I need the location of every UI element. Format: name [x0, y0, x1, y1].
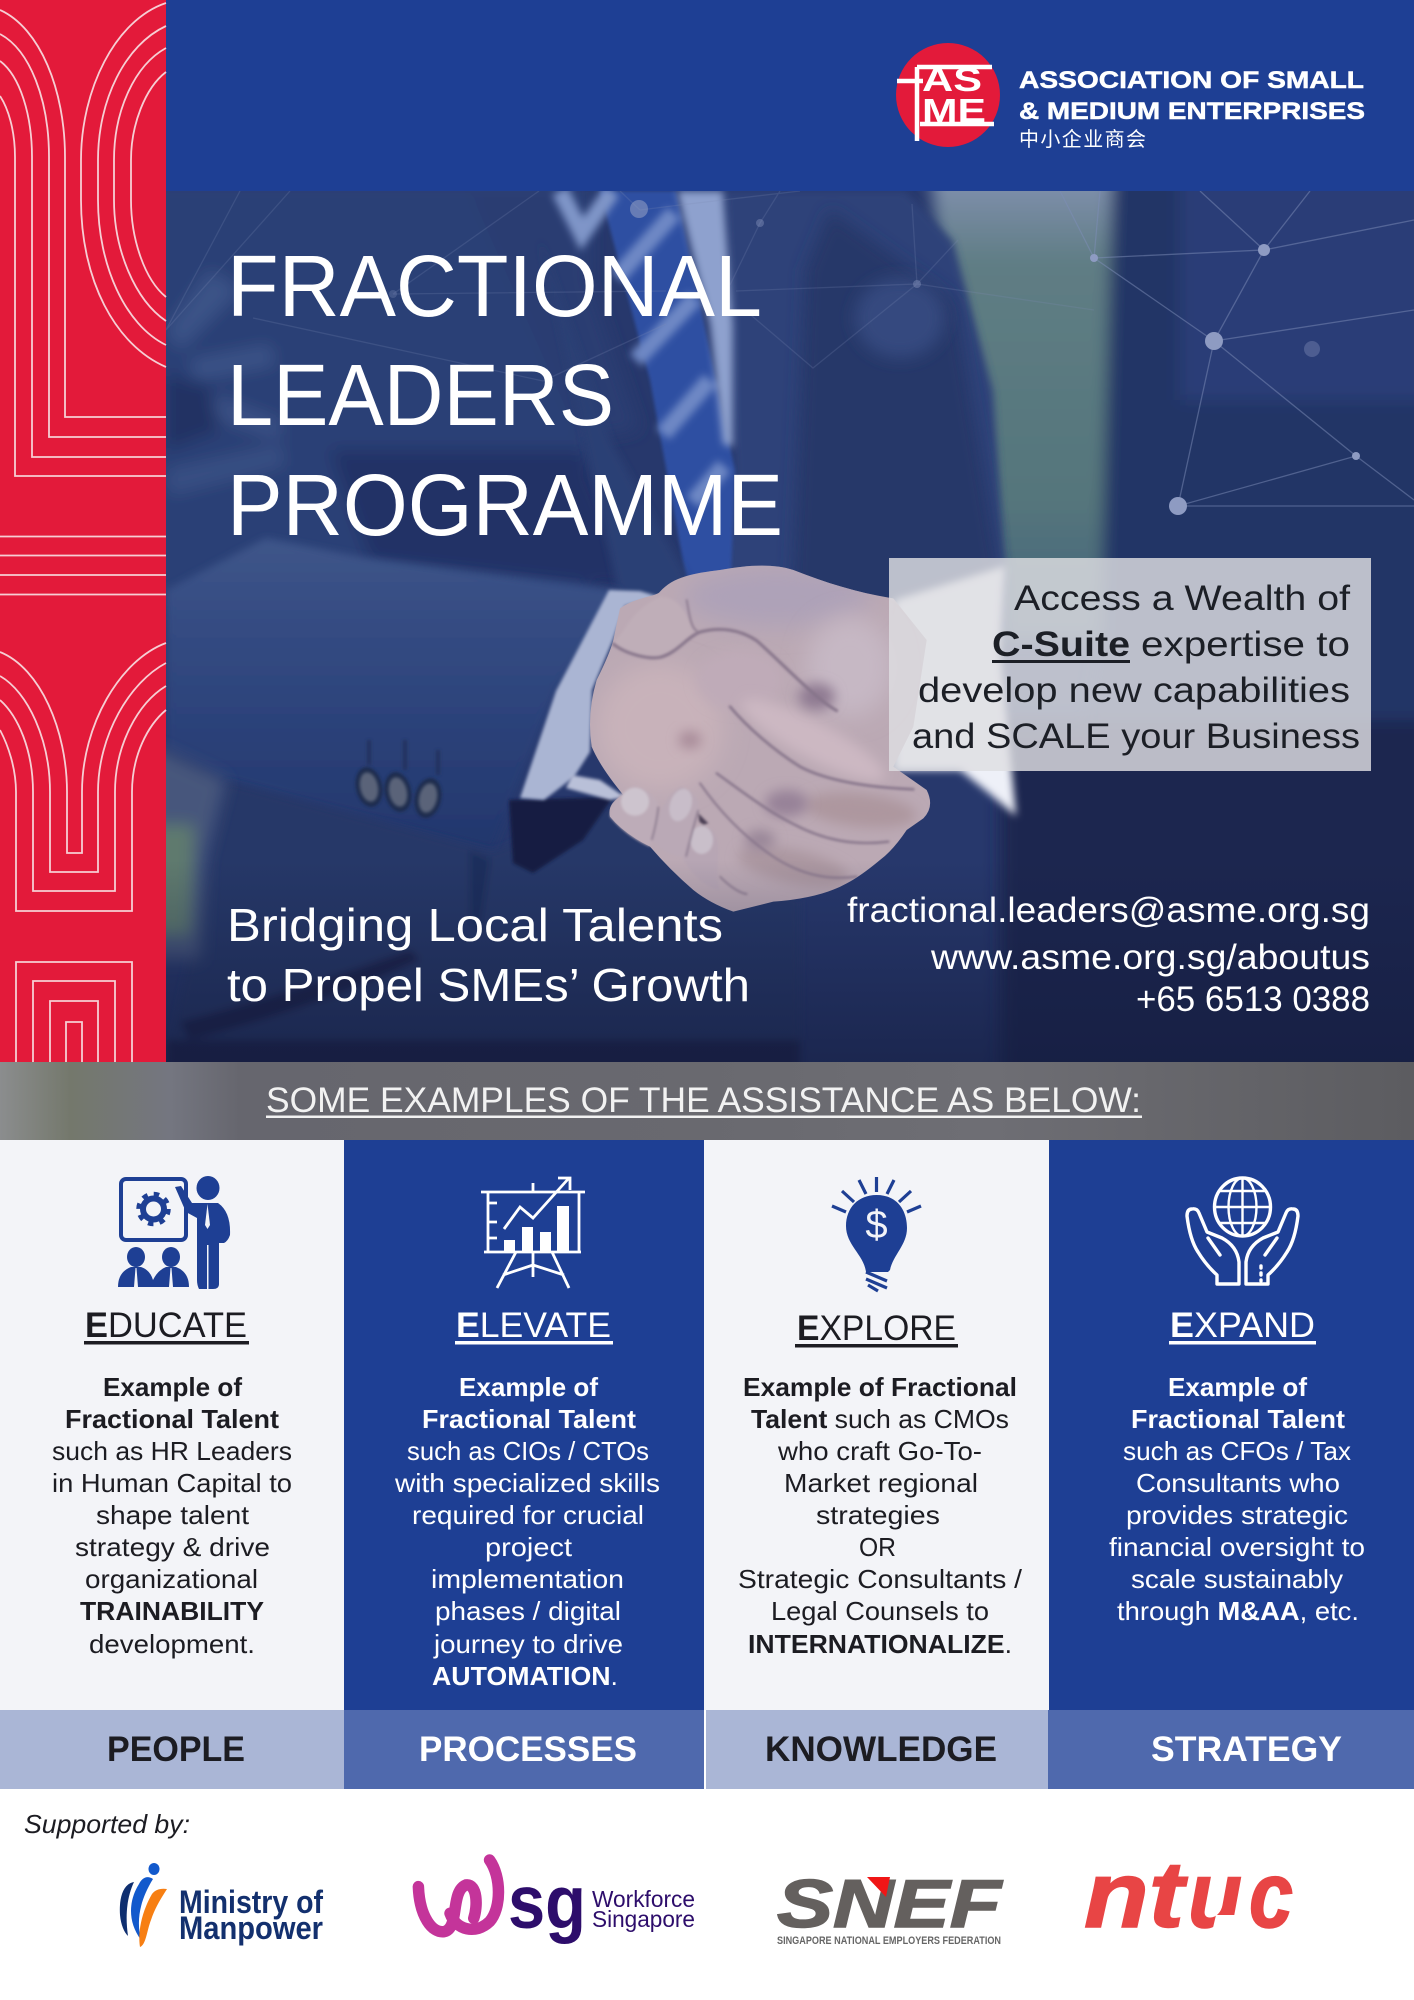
label: processes: PROCESSES	[419, 1730, 637, 1769]
callout: C-Suite expertise: expertise to	[1141, 625, 1350, 664]
hero photo: handshake	[166, 191, 1414, 1062]
blurred far background and right figure	[922, 191, 1414, 1062]
description: journey to drive	[433, 1629, 623, 1659]
label: people	[0, 1710, 344, 1789]
description: who craft Go-To-	[777, 1436, 982, 1466]
organisation name: & MEDIUM ENTERPRISES	[1019, 98, 1365, 125]
shadow inside sleeve	[509, 797, 613, 873]
description: strategies	[816, 1500, 940, 1530]
logo: Workforce Singapore: Singapore	[592, 1906, 695, 1932]
ASME logo	[896, 43, 1365, 151]
organisation name: ASSOCIATION OF SMALL	[1019, 67, 1364, 94]
tagline: to Propel SMEs’ Growth	[227, 959, 750, 1011]
banner: some examples: SOME EXAMPLES OF THE ASSISTANCE AS BELOW:	[266, 1081, 1141, 1120]
description: organizational	[85, 1564, 258, 1594]
icon: hands holding globe	[1187, 1178, 1298, 1284]
description: TRAINABILITY	[80, 1596, 264, 1626]
shirt and tie stripes	[560, 191, 733, 502]
red side strip with line pattern	[0, 0, 166, 1062]
panel: educate	[0, 1140, 344, 1710]
description: through M&AA, etc.	[1117, 1596, 1359, 1626]
description: such as CFOs / Tax	[1123, 1436, 1351, 1466]
description: Consultants who	[1136, 1468, 1340, 1498]
description: such as HR Leaders	[52, 1436, 292, 1466]
description: financial oversight to	[1109, 1532, 1365, 1562]
heading: EXPLORE	[797, 1309, 956, 1348]
sleeve and lower jacket	[166, 538, 614, 780]
logo mark: AS	[922, 61, 982, 98]
heading: ELEVATE	[456, 1306, 611, 1345]
panel: elevate	[344, 1140, 704, 1710]
heading: EXPAND	[1170, 1306, 1315, 1345]
icon: light bulb with dollar	[832, 1177, 921, 1291]
supported by text: Supported by:	[24, 1809, 190, 1839]
description: Fractional Talent	[1131, 1404, 1345, 1434]
contact details: fractional.leaders@asme.org.sg	[847, 891, 1370, 930]
icon: presenter with audience	[118, 1176, 230, 1289]
right shirt cuff	[895, 566, 1016, 816]
description	[738, 1372, 1023, 1659]
icon: light bulb with dollar: $	[865, 1203, 888, 1247]
description: Example of	[103, 1372, 242, 1402]
logo: Workforce Singapore: sg	[508, 1860, 586, 1944]
logo: NTUC	[1084, 1842, 1293, 1947]
Chinese name: 中小企业商会	[1019, 128, 1146, 151]
description: shape talent	[96, 1500, 250, 1530]
jacket buttons	[352, 740, 445, 820]
description: provides strategic	[1126, 1500, 1348, 1530]
logo: NTUC: c	[1249, 1842, 1293, 1947]
description: Example of	[1168, 1372, 1307, 1402]
description: Talent such as CMOs	[751, 1404, 1009, 1434]
logo: SNEF: SINGAPORE NATIONAL EMPLOYERS FEDERATION	[777, 1935, 1001, 1947]
callout: C-Suite expertise: develop new capabilities	[918, 671, 1350, 710]
organisation name	[1019, 67, 1365, 125]
title: PROGRAMME	[227, 457, 783, 554]
description: Fractional Talent	[422, 1404, 636, 1434]
description: INTERNATIONALIZE.	[748, 1629, 1012, 1659]
logo: SNEF: SNEF	[777, 1866, 1003, 1942]
description: project	[485, 1532, 573, 1562]
logo: Ministry of Manpower	[120, 1863, 323, 1947]
contact details: www.asme.org.sg/aboutus	[930, 938, 1370, 977]
description: with specialized skills	[394, 1468, 660, 1498]
tagline	[227, 899, 750, 1011]
tagline: Bridging Local Talents	[227, 899, 723, 951]
description: required for crucial	[412, 1500, 644, 1530]
description: implementation	[431, 1564, 624, 1594]
thumb	[613, 597, 693, 657]
logo: NTUC: u	[1188, 1842, 1242, 1947]
finger creases	[613, 600, 913, 894]
description: scale sustainably	[1131, 1564, 1343, 1594]
description	[52, 1372, 292, 1659]
logo: Workforce Singapore: Workforce	[592, 1886, 695, 1912]
description: AUTOMATION.	[432, 1661, 618, 1691]
logo mark: ME	[922, 92, 986, 129]
heading: EDUCATE	[85, 1306, 247, 1345]
contact details: +65 6513 0388	[1136, 980, 1370, 1019]
edge of background at lower left	[166, 748, 229, 963]
description	[394, 1372, 660, 1691]
label: knowledge: KNOWLEDGE	[765, 1730, 997, 1769]
centre jacket, shirt and tie	[593, 191, 1011, 594]
callout: C-Suite expertise: C-Suite	[992, 625, 1130, 664]
description: Example of	[459, 1372, 598, 1402]
description: in Human Capital to	[52, 1468, 292, 1498]
description: phases / digital	[435, 1596, 621, 1626]
banner: some examples	[0, 1062, 1414, 1140]
label: knowledge	[706, 1710, 1048, 1789]
logo: Workforce Singapore	[418, 1860, 695, 1944]
description: such as CIOs / CTOs	[407, 1436, 649, 1466]
icon: presentation chart	[481, 1178, 585, 1288]
left jacket with creases	[166, 191, 583, 552]
description: Legal Counsels to	[771, 1596, 989, 1626]
callout: C-Suite expertise: Access a Wealth of	[1014, 579, 1350, 618]
logo: NTUC: nt	[1084, 1842, 1188, 1947]
title: FRACTIONAL	[227, 238, 762, 335]
top blue header bar	[166, 0, 1414, 191]
fingertips	[608, 787, 714, 858]
logo: Ministry of Manpower: Ministry of	[179, 1884, 323, 1920]
description: Market regional	[784, 1468, 978, 1498]
clasped hands	[590, 566, 930, 912]
title	[227, 238, 783, 554]
logo: Ministry of Manpower: Manpower	[179, 1910, 323, 1946]
label: people: PEOPLE	[107, 1730, 245, 1769]
contact details	[847, 891, 1370, 1019]
label: processes	[344, 1710, 704, 1789]
label: strategy: STRATEGY	[1151, 1730, 1342, 1769]
title: LEADERS	[227, 347, 614, 444]
panel: explore	[704, 1140, 1049, 1710]
description: OR	[859, 1532, 896, 1562]
description: development.	[89, 1629, 255, 1659]
logo mark	[896, 43, 1000, 147]
description: Strategic Consultants /	[738, 1564, 1023, 1594]
description: Fractional Talent	[65, 1404, 279, 1434]
label: strategy	[1048, 1710, 1414, 1789]
callout: C-Suite expertise: and SCALE your Business	[912, 717, 1360, 756]
description	[1109, 1372, 1365, 1626]
network lines	[166, 191, 1414, 506]
panel: expand	[1049, 1140, 1414, 1710]
description: Example of Fractional	[743, 1372, 1017, 1402]
shirt cuff	[520, 590, 660, 800]
description: strategy & drive	[75, 1532, 270, 1562]
category label bands	[0, 1710, 1414, 1789]
callout: C-Suite expertise	[889, 558, 1371, 771]
